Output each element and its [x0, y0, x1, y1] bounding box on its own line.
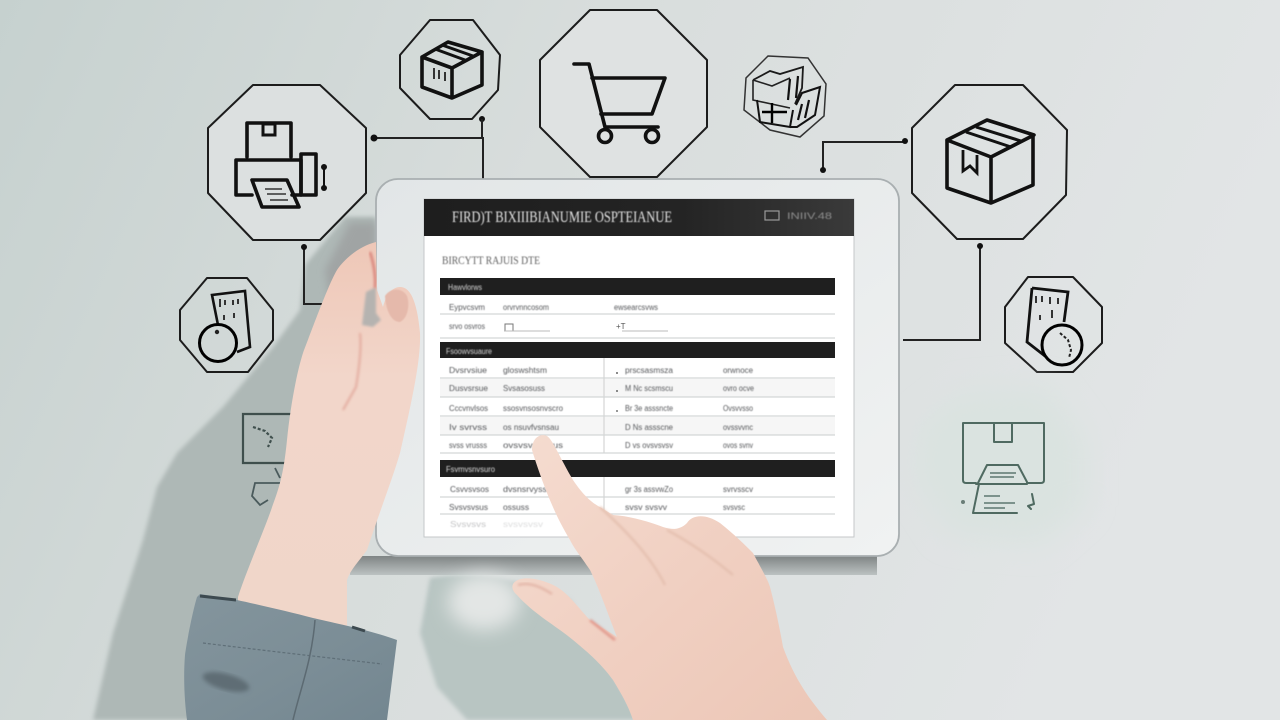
table section 2: M Nc scsmscu [625, 384, 673, 393]
icon: printer in octagon [208, 85, 366, 240]
screen header bar [424, 199, 854, 236]
table section 2: ovssvvnc [723, 423, 753, 432]
icon: receipt and coin, right [1005, 277, 1102, 372]
connector: lower right to tablet [903, 243, 983, 340]
icon: receipt and coin, left [180, 278, 273, 372]
icon: faded printer with glow, lower right [915, 386, 1085, 545]
hand: right hand pointing at the screen [512, 435, 827, 720]
table section 1: Eypvcsvm [449, 303, 485, 312]
sleeve [184, 594, 397, 720]
table section 3: dvsnsrvyss [503, 485, 547, 494]
table section 1: orvrvnncosom [503, 303, 549, 312]
table section 2: Br 3e asssncte [625, 404, 673, 413]
screen header bar: FIRD)T BIXIIIBIANUMIE OSPTEIANUE [452, 209, 672, 226]
table section 3: svsvsc [723, 503, 745, 512]
table section 2: orwnoce [723, 366, 754, 375]
table section 1: ewsearcsvws [614, 303, 658, 312]
table section 2: ssosvnsosnvscro [503, 404, 564, 413]
tablet bezel [376, 179, 899, 556]
table section 2: ovos svnv [723, 441, 753, 450]
table section 2: gloswshtsm [503, 366, 547, 375]
table section 2: os nsuvfvsnsau [503, 423, 559, 432]
hand: left hand holding the tablet [238, 242, 420, 630]
icon: small stacked boxes in octagon [744, 56, 826, 137]
table section 2: ovsvsvsvnsus [503, 441, 563, 450]
table section 3: Svsvsvs [450, 520, 486, 529]
table section 2: D Ns assscne [625, 423, 674, 432]
hand and tablet shadows [93, 217, 877, 720]
table section 3 [440, 460, 835, 530]
icon: large parcel in octagon [912, 85, 1067, 239]
table section 2: Cccvnvlsos [449, 404, 488, 413]
connector: printer to left of tablet [301, 244, 322, 304]
table section 2: Ovsvvsso [723, 404, 753, 413]
table section 1 [440, 278, 835, 338]
table section 2: Fsoowvsuaure [446, 347, 492, 356]
table section 3: Fsvmvsnvsuro [446, 465, 496, 474]
connector: box to tablet [820, 138, 908, 173]
table section 3: svsvsvsv [503, 520, 543, 529]
tablet screen [424, 199, 854, 537]
tablet [376, 179, 899, 556]
table section 3: gr 3s assvwZo [625, 485, 674, 494]
table section 3: svrvsscv [723, 485, 753, 494]
table section 2: D vs ovsvsvsv [625, 441, 673, 450]
table section 2: Iv svrvss [449, 423, 487, 432]
table section 2: svss vrusss [449, 441, 487, 450]
table section 2: ovro ocve [723, 384, 754, 393]
icon: faded monitor, lower left [243, 414, 295, 505]
table section 1: srvo osvros [449, 322, 485, 331]
icon: small box in octagon [400, 20, 500, 119]
table section 2: Svsasosuss [503, 384, 545, 393]
connector: printer to tablet [370, 116, 485, 179]
table section 2: Dusvsrsue [449, 384, 489, 393]
table section 3: Svsvsvsus [449, 503, 488, 512]
table section 2: Dvsrvsiue [449, 366, 488, 375]
table section 1: Hawvlorws [448, 283, 482, 292]
screen header bar: INIIV.48 [787, 211, 832, 221]
icon: shopping cart in octagon [540, 10, 707, 177]
form heading: BIRCYTT RAJUIS DTE [442, 253, 540, 267]
table section 2 [440, 342, 835, 453]
table section 3: svsv svsvv [625, 503, 667, 512]
table section 3: ossuss [503, 503, 529, 512]
table section 2: prscsasmsza [625, 366, 674, 375]
table section 3: Csvvsvsos [450, 485, 489, 494]
table section 1: +T [616, 322, 626, 331]
